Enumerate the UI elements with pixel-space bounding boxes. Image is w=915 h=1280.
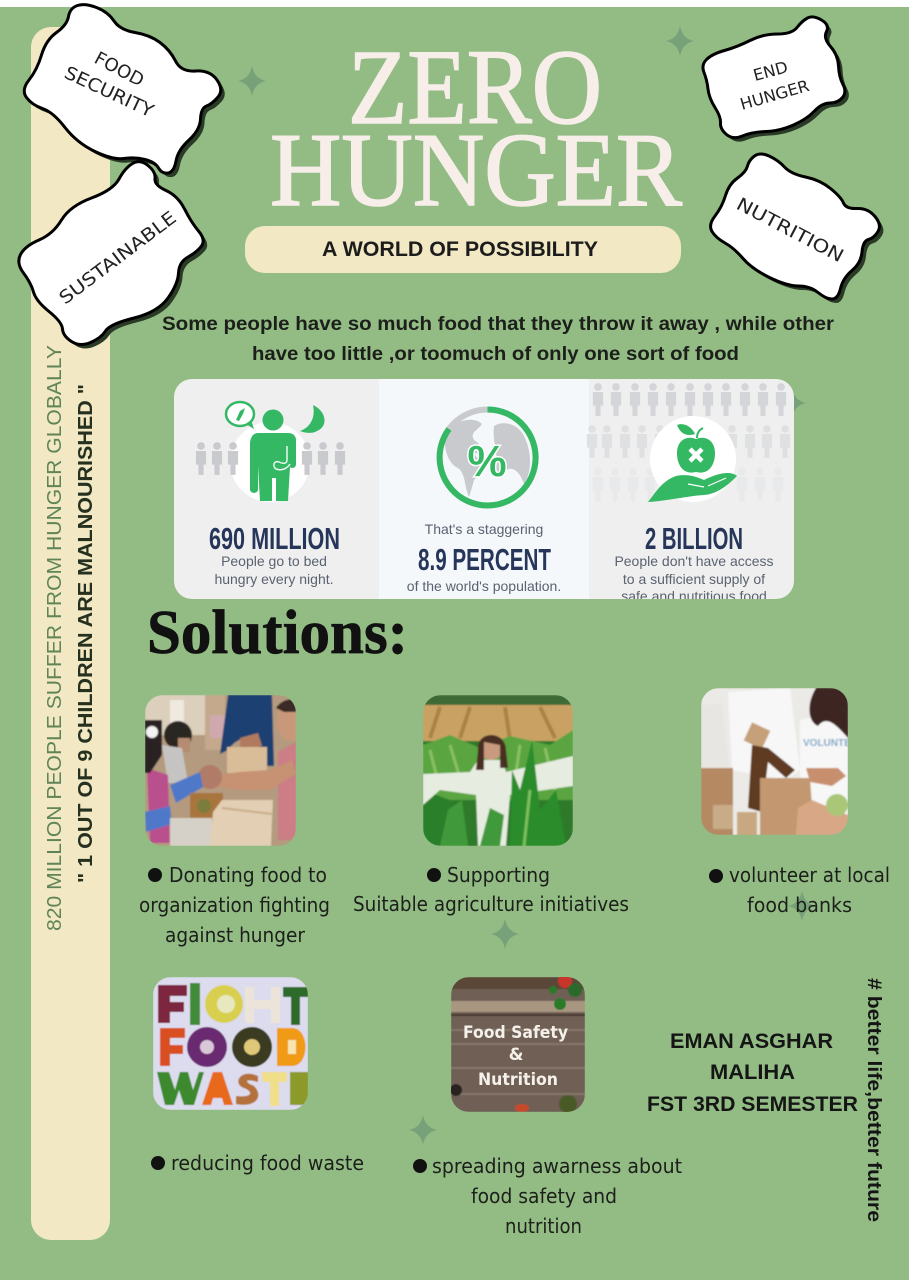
icon: globe percentage ring <box>440 409 536 506</box>
photo: food safety and nutrition: Nutrition <box>478 1070 558 1090</box>
stat: 8.9 percent: of the world's population. <box>407 578 561 594</box>
decorative sparkles <box>238 26 816 1145</box>
photo: volunteers <box>701 688 848 835</box>
caption: donating food: organization fighting <box>139 893 330 917</box>
stat: 690 million: hungry every night. <box>214 571 334 587</box>
panel: statistics <box>174 379 794 604</box>
badge: nutrition: NUTRITION <box>733 194 847 267</box>
caption: spreading awareness: food safety and <box>471 1184 617 1208</box>
stat: 690 million <box>210 528 339 587</box>
heading: solutions: Solutions: <box>147 599 408 667</box>
stat: 8.9 percent <box>407 521 561 594</box>
authors: EMAN ASGHAR <box>670 1030 833 1053</box>
side banner <box>31 27 110 1240</box>
caption: spreading awareness: nutrition <box>505 1214 582 1238</box>
photo: donating food <box>145 695 296 846</box>
side text: children malnourished: " 1 OUT OF 9 CHILDREN ARE MALNOURISHED " <box>75 384 97 883</box>
stat: 2 billion <box>616 528 773 599</box>
icon: apple in hand with crowd <box>587 383 790 502</box>
intro paragraph: Some people have so much food that they throw it away , while other <box>162 314 835 335</box>
caption: spreading awareness: spreading awarness about <box>432 1154 682 1178</box>
badge: end hunger: HUNGER <box>738 76 811 114</box>
badge: sustainable <box>19 162 207 349</box>
stat: 2 billion: People don't have access <box>614 553 774 569</box>
caption: donating food <box>139 863 330 947</box>
caption: donating food: Donating food to <box>169 863 327 887</box>
icon: globe percentage ring: % <box>467 437 507 486</box>
caption: supporting agriculture: Suitable agriculture initiatives <box>353 892 629 916</box>
caption: supporting agriculture <box>353 863 629 916</box>
stat: 8.9 percent: That's a staggering <box>425 521 543 537</box>
photo: fight food waste <box>153 977 308 1110</box>
caption: donating food: against hunger <box>165 923 306 947</box>
stat: 2 billion: to a sufficient supply of <box>623 571 765 587</box>
authors: FST 3RD SEMESTER <box>647 1093 858 1116</box>
caption: reducing food waste: reducing food waste <box>171 1151 364 1175</box>
authors <box>647 1030 858 1116</box>
badge: sustainable: SUSTAINABLE <box>55 207 181 309</box>
title: ZERO <box>348 29 602 147</box>
hashtag: # better life,better future <box>863 978 884 1222</box>
intro paragraph <box>162 314 835 365</box>
stat: 8.9 percent: 8.9 PERCENT <box>418 542 551 577</box>
badge: food security <box>24 5 225 177</box>
stat: 690 million: People go to bed <box>221 553 327 569</box>
stat: 690 million: 690 MILLION <box>209 521 340 556</box>
badge: end hunger <box>703 17 849 142</box>
subtitle pill <box>245 226 681 273</box>
photo: volunteers: VOLUNTEER <box>803 738 865 749</box>
title: HUNGER <box>270 111 682 228</box>
photo: food safety and nutrition <box>450 974 585 1113</box>
badge: nutrition <box>711 154 883 303</box>
title <box>270 29 682 228</box>
stat: 2 billion: safe and nutritious food <box>621 588 767 604</box>
side text: global hunger figure: 820 MILLION PEOPLE SUFFER FROM HUNGER GLOBALLY <box>44 345 66 931</box>
badge: food security: SECURITY <box>61 62 158 123</box>
photo: food safety and nutrition: Food Safety <box>463 1023 568 1043</box>
stat: 2 billion: 2 BILLION <box>645 521 743 556</box>
caption: spreading awareness <box>413 1154 682 1238</box>
badge: end hunger: END <box>751 57 790 85</box>
caption: supporting agriculture: Supporting <box>447 863 550 887</box>
subtitle pill: A WORLD OF POSSIBILITY <box>322 238 598 261</box>
caption: volunteer: volunteer at local <box>729 863 890 887</box>
intro paragraph: have too little ,or toomuch of only one sort of food <box>252 344 739 365</box>
authors: MALIHA <box>710 1061 795 1084</box>
caption: volunteer <box>709 863 890 917</box>
photo: food safety and nutrition: & <box>509 1045 524 1065</box>
badge: food security: FOOD <box>91 48 147 91</box>
photo: agriculture <box>423 695 573 846</box>
icon: hungry person <box>196 402 345 502</box>
caption: volunteer: food banks <box>747 893 852 917</box>
